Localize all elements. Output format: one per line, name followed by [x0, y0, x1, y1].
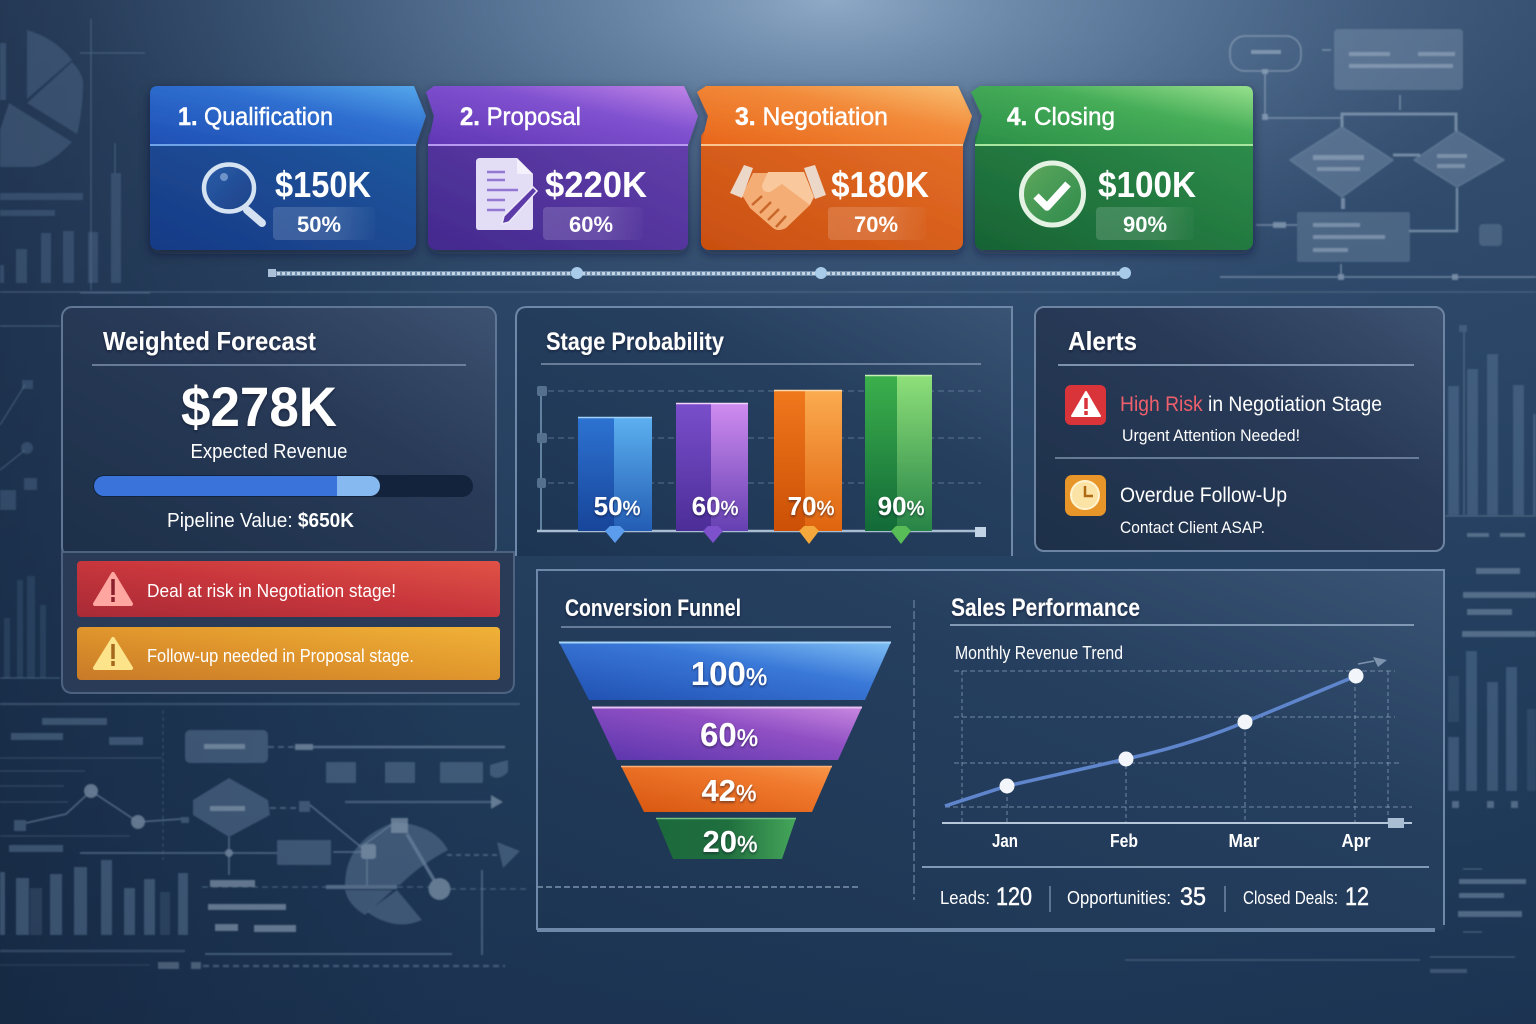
stage title: 3. Negotiation — [735, 103, 888, 131]
alert: high risk: Urgent Attention Needed! — [1122, 426, 1300, 445]
stage amount: $100K — [1098, 164, 1196, 205]
bar label: 90% — [878, 491, 925, 521]
alert: high risk — [1065, 385, 1382, 445]
panel: alerts — [1035, 307, 1444, 551]
pipeline value: Pipeline Value: $650K — [167, 510, 355, 532]
stage percent — [1096, 207, 1194, 240]
stage card: 2. Proposal — [426, 86, 698, 250]
sales stats: Leads: — [940, 888, 990, 908]
right side charts — [1448, 325, 1536, 791]
sales stats: Closed Deals: — [1243, 888, 1338, 908]
axis label: Mar — [1228, 831, 1260, 851]
warning: deal at risk: Deal at risk in Negotiation stage! — [147, 581, 396, 601]
stage title: 1. Qualification — [178, 103, 333, 131]
bar label: 60% — [692, 491, 739, 521]
warning: follow-up needed — [77, 627, 500, 680]
stage percent — [543, 207, 643, 240]
stage percent: 50% — [297, 212, 341, 237]
warning: deal at risk — [77, 561, 500, 617]
chart subtitle: Monthly Revenue Trend — [955, 643, 1123, 663]
pipeline timeline — [268, 267, 1131, 279]
panel: weighted forecast — [62, 307, 496, 557]
sales stats — [940, 883, 1369, 912]
stage percent: 90% — [1123, 212, 1167, 237]
heading: conversion funnel: Conversion Funnel — [565, 595, 741, 622]
funnel label: 60% — [700, 716, 758, 753]
bar label: 70% — [788, 491, 835, 521]
top right flowchart — [1290, 29, 1504, 262]
heading: Weighted Forecast — [103, 326, 316, 356]
alert: overdue follow-up — [1065, 475, 1287, 537]
bottom left flowchart — [0, 718, 520, 935]
funnel label: 20% — [703, 824, 757, 859]
stage amount: $180K — [831, 164, 929, 205]
panel: deal warnings — [62, 552, 514, 693]
panel: funnel and sales performance — [537, 570, 1444, 930]
forecast value: $278K — [181, 375, 337, 438]
stage percent — [273, 207, 375, 240]
sales stats: Opportunities: — [1067, 888, 1171, 908]
stage amount: $220K — [545, 164, 647, 205]
progress bar — [93, 475, 473, 497]
top rule — [175, 65, 1185, 67]
icon: check circle — [1022, 163, 1084, 225]
heading: Stage Probability — [546, 328, 724, 356]
warning: follow-up needed: Follow-up needed in Proposal stage. — [147, 646, 414, 666]
stage percent — [828, 207, 926, 240]
stage card: 1. Qualification — [150, 86, 426, 250]
stage percent: 70% — [854, 212, 898, 237]
heading: sales performance: Sales Performance — [951, 594, 1140, 622]
stage card: 4. Closing — [971, 86, 1253, 250]
alert: overdue follow-up: Overdue Follow-Up — [1120, 484, 1287, 507]
stage card: 3. Negotiation — [697, 86, 972, 250]
axis label: Apr — [1342, 831, 1370, 851]
stage title: 2. Proposal — [460, 103, 581, 131]
sales stats: 12 — [1345, 883, 1369, 911]
stage title: 4. Closing — [1007, 103, 1115, 131]
icon: document with pen — [476, 158, 537, 230]
icon: handshake — [730, 165, 826, 230]
stage percent: 60% — [569, 212, 613, 237]
axis label: Jan — [992, 831, 1018, 851]
bar label: 50% — [594, 491, 641, 521]
heading: Alerts — [1068, 326, 1137, 356]
line chart — [942, 657, 1412, 851]
forecast caption: Expected Revenue — [190, 441, 348, 463]
stage amount: $150K — [275, 164, 371, 205]
panel: stage probability — [516, 307, 1012, 556]
alert: overdue follow-up: Contact Client ASAP. — [1120, 518, 1265, 537]
sales stats: 120 — [996, 883, 1032, 911]
bar chart — [537, 375, 986, 544]
funnel label: 100% — [691, 655, 767, 692]
funnel label: 42% — [702, 773, 756, 808]
icon: magnifying glass — [204, 164, 262, 223]
alert: high risk: High Risk in Negotiation Stage — [1120, 393, 1382, 416]
axis label: Feb — [1110, 831, 1138, 851]
top left pie and bars — [0, 30, 121, 678]
funnel chart — [559, 642, 891, 859]
sales stats: 35 — [1180, 883, 1206, 911]
